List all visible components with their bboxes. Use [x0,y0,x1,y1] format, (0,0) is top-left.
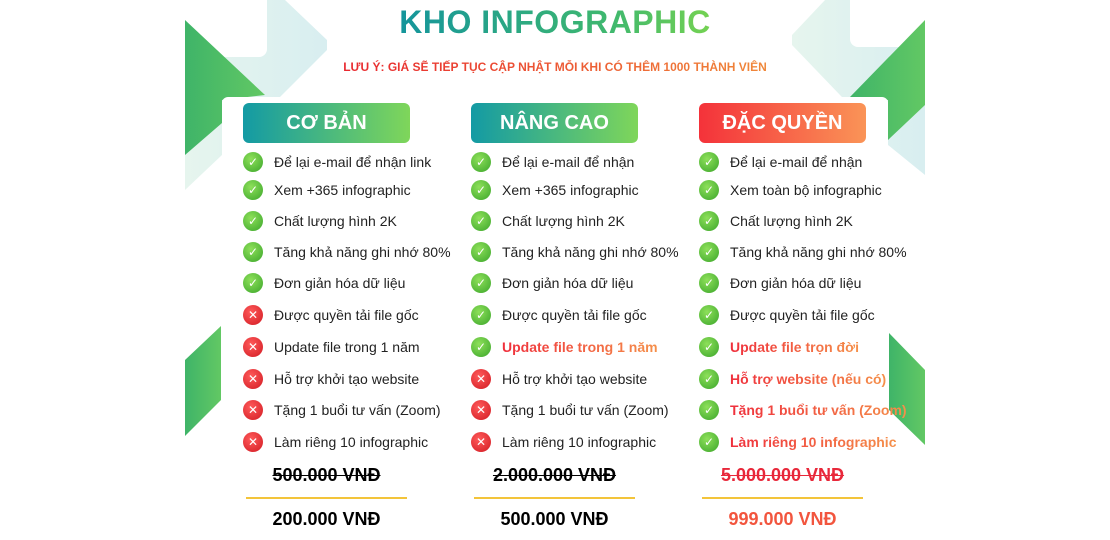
feature list: ✕ [248,435,258,449]
feature list: ✓ [704,308,714,322]
feature list: Chất lượng hình 2K [502,213,625,229]
feature list: Hỗ trợ khởi tạo website [502,371,647,387]
feature list: Hỗ trợ website (nếu có) [730,371,886,387]
feature list: ✕ [248,403,258,417]
feature list: ✓ [476,214,486,228]
feature list: Để lại e-mail để nhận [730,154,862,170]
header: co ban: CƠ BẢN [286,112,367,134]
feature list: ✕ [476,372,486,386]
feature list: ✓ [248,214,258,228]
feature list [699,152,907,452]
feature list: Update file trong 1 năm [502,339,658,355]
panel: dac quyen [699,103,907,529]
feature list: ✓ [704,435,714,449]
title [0,4,1110,41]
header: co ban [243,103,410,143]
old price: 2.000.000 VNĐ [493,465,616,485]
feature list [471,152,679,452]
feature list: ✓ [248,245,258,259]
feature list: ✓ [248,183,258,197]
feature list: Được quyền tải file gốc [274,307,419,323]
feature list: ✓ [476,308,486,322]
feature list: Tặng 1 buổi tư vấn (Zoom) [730,402,907,418]
feature list [243,152,451,452]
feature list: Xem +365 infographic [502,182,639,198]
feature list: Update file trọn đời [730,339,859,355]
new price: 200.000 VNĐ [272,509,381,529]
feature list: Đơn giản hóa dữ liệu [502,275,633,291]
feature list: ✕ [248,372,258,386]
feature list: ✓ [476,276,486,290]
feature list: ✕ [248,308,258,322]
feature list: ✕ [476,435,486,449]
feature list: Làm riêng 10 infographic [502,434,656,450]
feature list: Để lại e-mail để nhận link [274,154,431,170]
feature list: Tăng khả năng ghi nhớ 80% [730,244,907,260]
new price: 500.000 VNĐ [500,509,609,529]
panel: co ban [243,103,451,529]
feature list: Được quyền tải file gốc [502,307,647,323]
feature list: ✓ [704,155,714,169]
feature list: Hỗ trợ khởi tạo website [274,371,419,387]
feature list: ✓ [704,183,714,197]
old price: 5.000.000 VNĐ [721,465,844,485]
feature list: Chất lượng hình 2K [274,213,397,229]
feature list: Để lại e-mail để nhận [502,154,634,170]
feature list: Làm riêng 10 infographic [730,434,896,450]
feature list: Tặng 1 buổi tư vấn (Zoom) [274,402,441,418]
feature list: Đơn giản hóa dữ liệu [274,275,405,291]
header: dac quyen [699,103,866,143]
feature list: Xem toàn bộ infographic [730,182,882,198]
feature list: ✓ [248,276,258,290]
feature list: ✓ [476,183,486,197]
header: dac quyen: ĐẶC QUYỀN [722,112,842,134]
feature list: ✓ [476,245,486,259]
subtitle note: LƯU Ý: GIÁ SẼ TIẾP TỤC CẬP NHẬT MỖI KHI CÓ THÊM 1000 THÀNH VIÊN [343,60,767,74]
feature list: Update file trong 1 năm [274,339,420,355]
feature list: ✓ [476,155,486,169]
feature list: Làm riêng 10 infographic [274,434,428,450]
title: KHO INFOGRAPHIC [399,4,711,40]
feature list: Xem +365 infographic [274,182,411,198]
feature list: Tăng khả năng ghi nhớ 80% [274,244,451,260]
feature list: ✓ [704,214,714,228]
feature list: ✓ [704,276,714,290]
header: nang cao [471,103,638,143]
feature list: Đơn giản hóa dữ liệu [730,275,861,291]
subtitle note [0,60,1110,74]
panel: nang cao [471,103,679,529]
new price: 999.000 VNĐ [728,509,837,529]
header: nang cao: NÂNG CAO [500,112,609,134]
feature list: ✓ [704,340,714,354]
old price: 500.000 VNĐ [272,465,381,485]
feature list: ✓ [248,155,258,169]
feature list: ✕ [248,340,258,354]
feature list: Tăng khả năng ghi nhớ 80% [502,244,679,260]
feature list: ✓ [704,403,714,417]
feature list: ✓ [704,372,714,386]
feature list: Tặng 1 buổi tư vấn (Zoom) [502,402,669,418]
feature list: ✓ [476,340,486,354]
feature list: Được quyền tải file gốc [730,307,875,323]
feature list: Chất lượng hình 2K [730,213,853,229]
feature list: ✓ [704,245,714,259]
feature list: ✕ [476,403,486,417]
